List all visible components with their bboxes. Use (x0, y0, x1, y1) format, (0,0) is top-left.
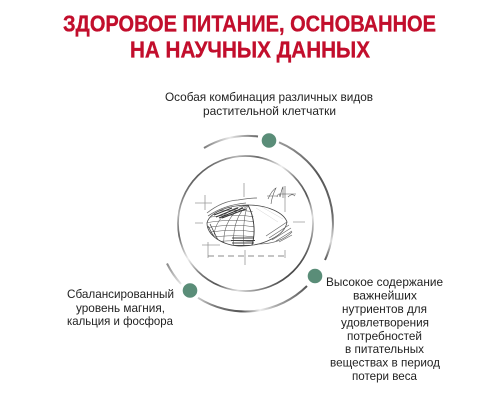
inner ring (178, 156, 313, 291)
text block: nutrients: в питательных (345, 343, 424, 356)
text block: plant fibre: Особая комбинация различных видов (165, 91, 373, 104)
icon: kibble sketch (195, 183, 305, 265)
upper contour lines (207, 198, 257, 216)
text block: minerals (67, 288, 174, 328)
dark shading (214, 208, 246, 218)
text block: nutrients: потребностей (347, 330, 422, 343)
text block: nutrients: удовлетворения (341, 316, 429, 330)
text block: plant fibre (165, 91, 373, 118)
centre meridian (248, 205, 254, 245)
title (63, 10, 436, 62)
text block: nutrients (326, 276, 443, 383)
outer ring arcs (167, 136, 333, 311)
text block: minerals: Сбалансированный (67, 288, 174, 301)
marker: right (308, 269, 322, 283)
shaded side hatching (258, 222, 292, 244)
marker: top (262, 133, 276, 148)
crosshair and dimension lines (195, 183, 305, 265)
light upper right (256, 207, 283, 222)
signature (267, 186, 296, 204)
text block: minerals: уровень магния, (76, 302, 165, 315)
text block: nutrients: веществах в период (330, 356, 440, 370)
text block: minerals: кальция и фосфора (67, 315, 174, 328)
kibble grid (205, 205, 283, 247)
text block: nutrients: потери веса (352, 370, 418, 383)
text block: plant fibre: растительной клетчатки (203, 105, 336, 118)
text block: nutrients: нутриентов для (342, 303, 427, 316)
kibble outline (207, 205, 287, 246)
marker: left (183, 283, 197, 298)
title: НА НАУЧНЫХ ДАННЫХ (130, 36, 370, 62)
text block: nutrients: Высокое содержание (326, 276, 443, 289)
text block: nutrients: важнейших (353, 290, 417, 302)
title: ЗДОРОВОЕ ПИТАНИЕ, ОСНОВАННОЕ (63, 10, 436, 36)
